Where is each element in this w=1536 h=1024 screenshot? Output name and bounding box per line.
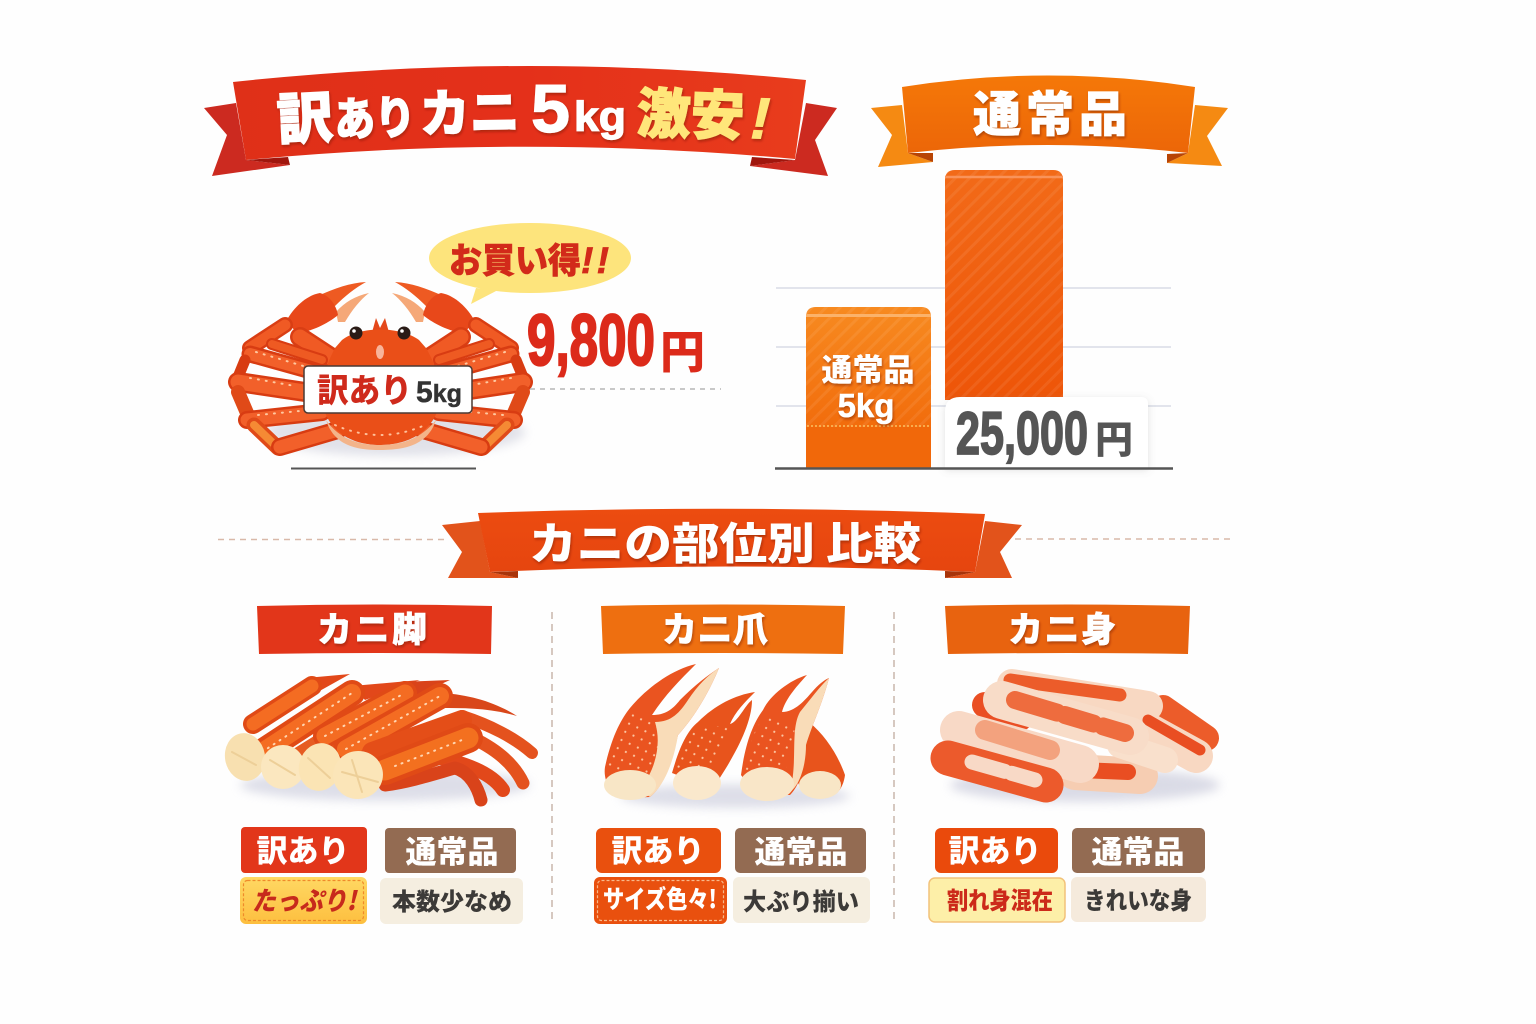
heading: カニ脚: [257, 602, 492, 654]
price label: 25,000円: 25,000: [956, 400, 1088, 467]
crab shell: [322, 318, 440, 450]
claw 2: [672, 692, 755, 790]
heading: カニ身: カニ身: [1008, 602, 1116, 653]
tag: 通常品: [735, 827, 866, 873]
bar chart: price comparison: [775, 170, 1173, 468]
icon: crab illustration: [236, 282, 525, 450]
price: 9,800円: 9,800: [527, 301, 655, 381]
bar: 通常品 tall: [945, 170, 1063, 400]
crab sign: 訳あり 5kg: [304, 364, 472, 413]
claw 3: [741, 675, 829, 795]
price label: 25,000円: 円: [1095, 409, 1133, 464]
speech bubble: お買い得!!: !!: [581, 240, 609, 281]
main ribbon title text: kg: [574, 93, 626, 140]
bar: 通常品 5kg: 5kg: [838, 387, 894, 424]
speech bubble: お買い得!!: お買い得: [449, 233, 581, 284]
claw 1: [605, 664, 719, 798]
speech bubble: お買い得!!: [429, 223, 631, 304]
main ribbon: 訳ありカニ 5kg 激安!: [204, 66, 837, 176]
main ribbon title text: 激安: [635, 69, 746, 152]
note: サイズ色々!: [594, 877, 727, 924]
crab left legs and claw: [236, 282, 369, 448]
note: きれいな身: [1071, 877, 1206, 922]
illustration: crab legs: [221, 674, 532, 803]
note: たっぷり!: たっぷり!: [252, 881, 358, 918]
tag: 訳あり: 訳あり: [256, 826, 350, 871]
tag: 通常品: 通常品: [1092, 827, 1184, 872]
main ribbon title text: 5: [531, 71, 570, 147]
tag: 訳あり: 訳あり: [612, 826, 704, 871]
heading: カニ爪: [601, 602, 845, 654]
tag: 通常品: [385, 827, 516, 873]
illustration: crab meat sticks: [948, 680, 1220, 802]
price: 9,800円: 円: [660, 316, 705, 381]
note: 本数少なめ: 本数少なめ: [392, 882, 512, 917]
note: 大ぶり揃い: 大ぶり揃い: [743, 882, 859, 917]
thin back legs: [440, 693, 517, 716]
heading: カニ爪: カニ爪: [662, 602, 768, 653]
tag: 通常品: 通常品: [754, 827, 848, 872]
tag: 訳あり: 訳あり: [948, 826, 1042, 871]
main ribbon title text: カニ: [419, 71, 520, 147]
note: 本数少なめ: [380, 878, 523, 924]
main ribbon title text: [275, 69, 771, 157]
heading: カニ身: [945, 602, 1190, 654]
tag: 通常品: [1072, 827, 1205, 873]
note: きれいな身: きれいな身: [1084, 881, 1192, 916]
panel: カニ脚: [221, 602, 532, 924]
tag: 通常品: 通常品: [406, 827, 498, 872]
shells: [253, 686, 312, 724]
section ribbon: カニの部位別 比較: [442, 508, 1022, 578]
meat ends: [221, 730, 269, 784]
main ribbon title text: !: [750, 86, 771, 152]
illustration: crab claws: [604, 664, 850, 808]
crab sign: 訳あり 5kg: 5kg: [416, 376, 462, 409]
panel: カニ爪: [594, 602, 870, 924]
crab sign: 訳あり 5kg: 訳あり: [317, 364, 412, 412]
crab right legs and claw: [392, 282, 525, 448]
panel: カニ身: [929, 602, 1220, 922]
note: 大ぶり揃い: [733, 877, 870, 923]
orange ribbon text: 通常品: [973, 75, 1127, 145]
orange ribbon: 通常品: [871, 75, 1228, 167]
crab shadow: [265, 408, 525, 456]
section ribbon text: カニの部位別 比較: [529, 508, 921, 572]
note: サイズ色々!: サイズ色々!: [603, 880, 717, 916]
note: 割れ身混在: 割れ身混在: [947, 881, 1053, 916]
bar: 通常品 5kg: [806, 307, 931, 468]
bar: 通常品 5kg: 通常品: [822, 345, 914, 390]
main ribbon title text: あり: [333, 81, 416, 150]
heading: カニ脚: カニ脚: [317, 602, 427, 653]
main ribbon title text: 訳: [275, 73, 335, 157]
note: 割れ身混在: [929, 878, 1065, 922]
